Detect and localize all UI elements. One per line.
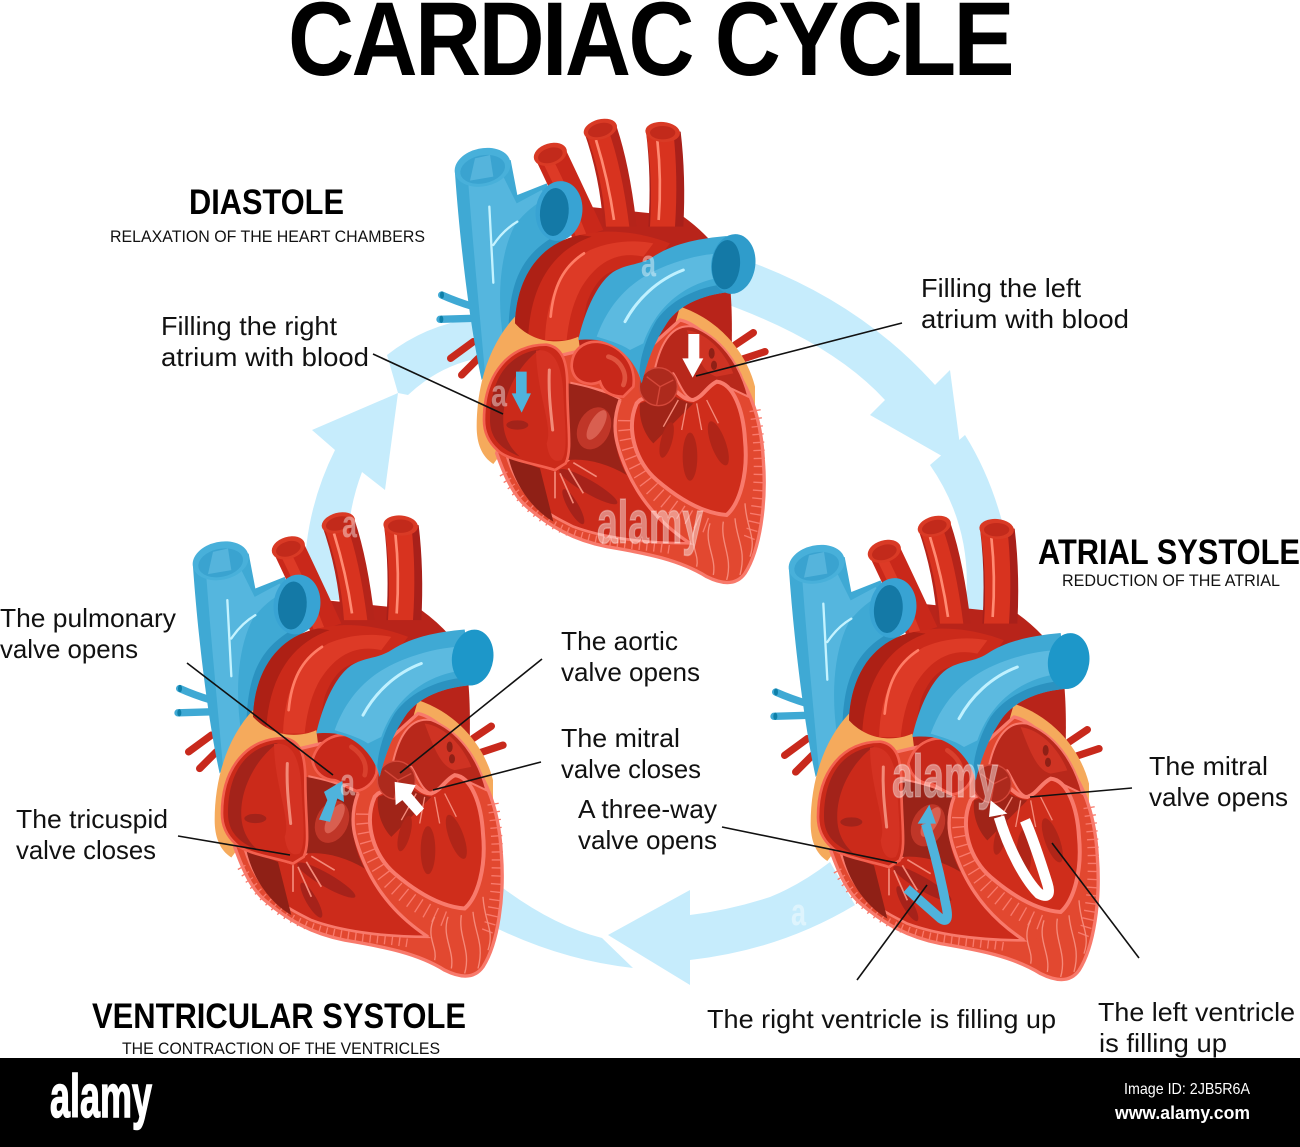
label: aortic valve opens — [561, 626, 700, 687]
heart chambers — [484, 320, 764, 583]
great vessels — [439, 115, 765, 464]
label: filling the right atrium: atrium with blood — [161, 342, 369, 372]
cycle arrow: ventricular systole to diastole — [304, 318, 480, 600]
footer image id: Image ID: 2JB5R6A — [1124, 1081, 1250, 1098]
watermarks — [340, 243, 998, 934]
heading: diastole: DIASTOLE — [189, 183, 344, 222]
label: pulmonary valve opens — [0, 603, 176, 664]
label: mitral valve closes: The mitral — [561, 723, 680, 753]
pulmonary artery — [316, 629, 473, 777]
pulmonary valve closed — [572, 342, 634, 397]
label: left ventricle filling: is filling up — [1099, 1028, 1227, 1058]
pulmonary artery end — [448, 627, 497, 688]
pulmonary artery — [578, 236, 735, 383]
label: tricuspid valve closes: The tricuspid — [16, 804, 168, 834]
leader lines — [178, 323, 1139, 980]
label: right ventricle filling: The right ventricle is filling up — [707, 1004, 1056, 1034]
heading: atrial systole — [1038, 533, 1300, 590]
arrow: white down — [682, 334, 703, 378]
label: three-way valve opens — [578, 794, 717, 855]
label: left ventricle filling — [1098, 997, 1295, 1058]
arrow: blue curved — [907, 805, 947, 920]
watermarks: a — [791, 892, 807, 934]
watermarks: a — [340, 762, 356, 804]
label: filling the left atrium: atrium with blood — [921, 304, 1129, 334]
watermarks: alamy — [597, 489, 703, 556]
heading: ventricular systole: VENTRICULAR SYSTOLE — [92, 997, 466, 1036]
label: aortic valve opens: valve opens — [561, 657, 700, 687]
footer logo: alamy — [50, 1063, 152, 1130]
arrow: white curved — [989, 800, 1049, 896]
pulmonary valve closed — [908, 738, 973, 794]
watermarks: a — [641, 243, 657, 285]
pulmonary valve open — [312, 735, 377, 791]
watermarks: a — [491, 373, 508, 415]
arrow: blue down — [512, 372, 531, 413]
heading: atrial systole: REDUCTION OF THE ATRIAL — [1062, 571, 1280, 590]
arrow: blue up — [319, 781, 344, 822]
label: mitral valve closes — [561, 723, 701, 784]
label: mitral valve opens: valve opens — [1149, 782, 1288, 812]
heart: atrial systole — [773, 512, 1099, 980]
label: aortic valve opens: The aortic — [561, 626, 678, 656]
label: left ventricle filling: The left ventricle — [1098, 997, 1295, 1027]
arrow: white diagonal — [395, 782, 424, 816]
footer bar — [0, 1058, 1300, 1147]
heart chambers — [222, 713, 502, 976]
heading: diastole — [110, 183, 425, 246]
label: three-way valve opens: A three-way — [578, 794, 717, 824]
pulmonary artery opening — [707, 231, 759, 297]
label: filling the right atrium — [161, 311, 369, 372]
label: three-way valve opens: valve opens — [578, 825, 717, 855]
heart: diastole — [439, 115, 765, 583]
heart: ventricular systole — [177, 509, 503, 976]
watermarks: alamy — [892, 743, 998, 810]
label: mitral valve opens — [1149, 751, 1288, 812]
great vessels — [177, 509, 503, 857]
label: filling the left atrium: Filling the left — [921, 273, 1082, 303]
watermarks: a — [342, 504, 358, 546]
label: mitral valve opens: The mitral — [1149, 751, 1268, 781]
label: filling the left atrium — [921, 273, 1129, 334]
label: tricuspid valve closes — [16, 804, 168, 865]
footer url: www.alamy.com — [1114, 1103, 1250, 1123]
label: mitral valve closes: valve closes — [561, 754, 701, 784]
heading: diastole: RELAXATION OF THE HEART CHAMBERS — [110, 227, 425, 246]
cycle arrow: atrial systole to ventricular systole — [490, 862, 855, 985]
heading: ventricular systole: THE CONTRACTION OF THE VENTRICLES — [122, 1039, 440, 1058]
label: pulmonary valve opens: valve opens — [0, 634, 138, 664]
pulmonary artery end — [1044, 630, 1093, 692]
heading: ventricular systole — [92, 997, 466, 1058]
cycle arrow: diastole to atrial systole — [715, 250, 1003, 610]
great vessels — [773, 512, 1099, 861]
label: tricuspid valve closes: valve closes — [16, 835, 156, 865]
heart chambers — [818, 717, 1098, 980]
label: filling the right atrium: Filling the right — [161, 311, 338, 341]
pulmonary artery — [912, 633, 1069, 780]
label: pulmonary valve opens: The pulmonary — [0, 603, 176, 633]
